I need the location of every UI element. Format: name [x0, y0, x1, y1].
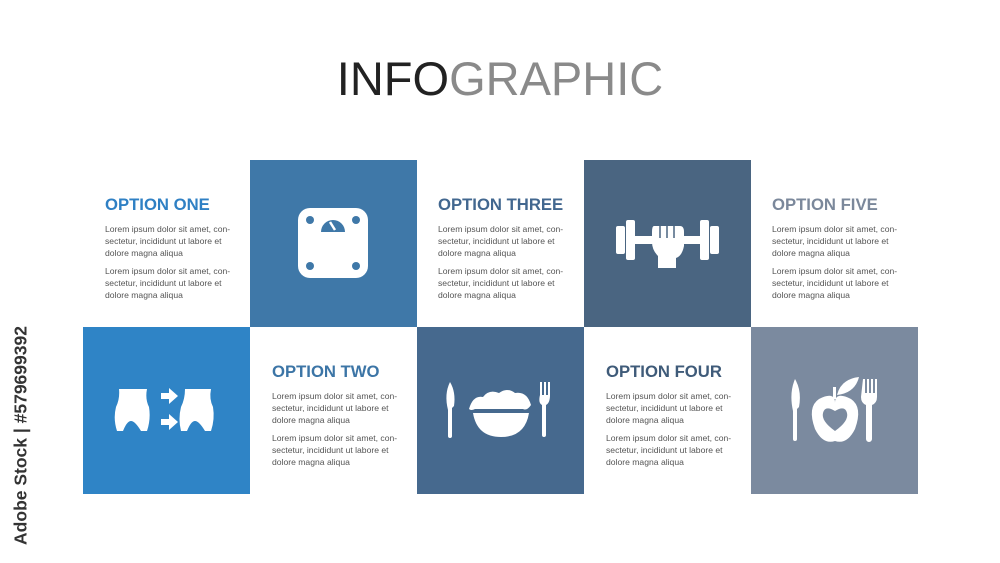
panel: scale square [250, 160, 417, 327]
text block: option one: Lorem ipsum dolor sit amet, con-sectetur, incididunt ut labore et dolore magna aliqua [105, 224, 230, 258]
text block: option one [105, 195, 230, 300]
icon: salad bowl [446, 382, 550, 438]
title: INFOGRAPHIC [337, 52, 663, 105]
panel: apple square [751, 327, 918, 494]
watermark side text: Adobe Stock | #579699392 [10, 326, 30, 545]
text block: option five: Lorem ipsum dolor sit amet, con-sectetur, incididunt ut labore et dolore magna aliqua [772, 266, 897, 300]
text block: option four: Lorem ipsum dolor sit amet, con-sectetur, incididunt ut labore et dolore magna aliqua [606, 433, 731, 467]
text block: option five: Lorem ipsum dolor sit amet, con-sectetur, incididunt ut labore et dolore magna aliqua [772, 224, 897, 258]
text block: option four: Lorem ipsum dolor sit amet, con-sectetur, incididunt ut labore et dolore magna aliqua [606, 391, 731, 425]
text block: option two: Lorem ipsum dolor sit amet, con-sectetur, incididunt ut labore et dolore magna aliqua [272, 433, 397, 467]
text block: option two: Lorem ipsum dolor sit amet, con-sectetur, incididunt ut labore et dolore magna aliqua [272, 391, 397, 425]
text block: option three: OPTION THREE [438, 195, 563, 214]
panel: dumbbell square [584, 160, 751, 327]
icon: scale [298, 208, 368, 278]
text block: option five: OPTION FIVE [772, 195, 878, 214]
icon: apple fork knife [791, 377, 877, 442]
text block: option two [272, 362, 397, 467]
text block: option one: OPTION ONE [105, 195, 210, 214]
text block: option three [438, 195, 563, 300]
text block: option two: OPTION TWO [272, 362, 380, 381]
panel: option one square [83, 327, 250, 494]
icon: body shape [114, 388, 214, 431]
text block: option four: OPTION FOUR [606, 362, 722, 381]
panel: salad square [417, 327, 584, 494]
icon: dumbbell fist [616, 220, 719, 268]
text block: option one: Lorem ipsum dolor sit amet, con-sectetur, incididunt ut labore et dolore magna aliqua [105, 266, 230, 300]
text block: option three: Lorem ipsum dolor sit amet, con-sectetur, incididunt ut labore et dolore magna aliqua [438, 266, 563, 300]
text block: option five [772, 195, 897, 300]
text block: option four [606, 362, 731, 467]
text block: option three: Lorem ipsum dolor sit amet, con-sectetur, incididunt ut labore et dolore magna aliqua [438, 224, 563, 258]
